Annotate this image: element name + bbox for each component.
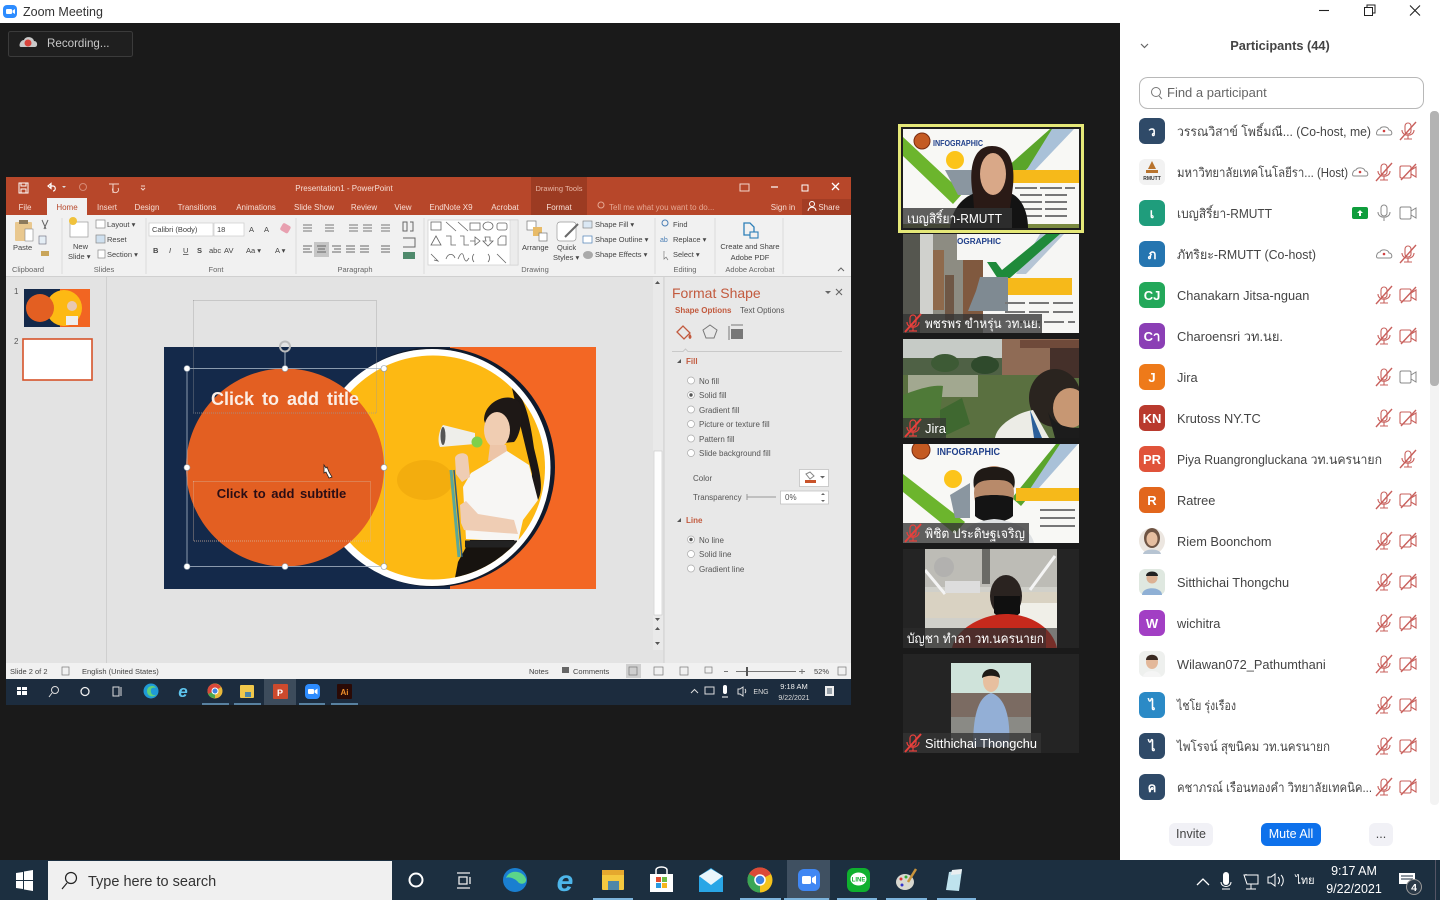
participant row 17 <box>1139 774 1416 800</box>
format shape pane <box>664 277 851 663</box>
fill radio options: No fill <box>699 377 719 386</box>
slide scrollbar <box>653 277 663 650</box>
ribbon <box>6 215 851 277</box>
transparency control <box>693 491 828 504</box>
status bar: Comments <box>573 667 610 676</box>
video tile: เบญสิริ์ยา-RMUTT (active speaker) <box>900 126 1082 232</box>
participant row 14 <box>1139 651 1416 677</box>
clipboard group <box>12 220 49 274</box>
status bar <box>6 663 851 679</box>
drawing group: Drawing <box>521 265 549 274</box>
participant row 15 <box>1139 692 1416 718</box>
powerpoint title bar: Share <box>818 203 840 212</box>
participant row 8 <box>1139 405 1416 431</box>
line <box>847 868 870 892</box>
search box: Find a participant <box>1167 85 1267 100</box>
video tile: Sitthichai Thongchu <box>903 654 1079 753</box>
drawing group: Styles ▾ <box>553 253 580 262</box>
powerpoint title bar: Format <box>546 203 572 212</box>
font group: Calibri (Body) <box>152 225 198 234</box>
status bar: 52% <box>814 667 829 676</box>
powerpoint title bar: Drawing Tools <box>536 184 583 193</box>
inner windows taskbar: P <box>277 688 283 698</box>
powerpoint title bar <box>6 177 851 215</box>
inner windows taskbar: 9/22/2021 <box>778 695 810 702</box>
selection handles <box>184 342 387 570</box>
invite button <box>1169 823 1213 846</box>
powerpoint window <box>6 177 851 705</box>
slides group <box>68 217 138 274</box>
clipboard group: Clipboard <box>12 265 44 274</box>
drawing group: Shape Effects ▾ <box>595 250 648 259</box>
system tray: 9:17 AM <box>1331 864 1377 878</box>
editing group: Find <box>673 220 688 229</box>
slide thumbnails <box>14 277 106 663</box>
slides group: Slide ▾ <box>68 252 91 261</box>
participant row 16: ไพโรจน์ สุขนิคม วท.นครนายก <box>1176 739 1330 755</box>
drawing group: Arrange <box>522 243 549 252</box>
participant row 14: Wilawan072_Pathumthani <box>1177 657 1326 672</box>
powerpoint title bar: Presentation1 - PowerPoint <box>295 184 393 193</box>
cortana and task view <box>410 873 470 888</box>
adobe acrobat group: Create and Share <box>720 242 780 251</box>
subtitle placeholder <box>194 482 370 541</box>
taskbar app icons <box>503 860 976 900</box>
participant row 4: ภัทริยะ-RMUTT (Co-host) <box>1177 247 1316 262</box>
participant row 16 <box>1139 733 1416 759</box>
participant row 4: ภ <box>1148 247 1156 262</box>
mute all button <box>1261 823 1321 846</box>
participant row 17: ค <box>1148 780 1156 795</box>
drawing group: Shape Outline ▾ <box>595 235 649 244</box>
colour control <box>693 470 828 486</box>
line radio options: No line <box>699 536 724 545</box>
fill effects icons <box>677 325 743 340</box>
line: LINE <box>852 878 865 884</box>
fill radio options: Picture or texture fill <box>699 420 770 429</box>
participants panel <box>1120 0 1440 860</box>
status bar: Notes <box>529 667 549 676</box>
participant row 5: Chanakarn Jitsa-nguan <box>1177 288 1309 303</box>
video tile: เบญสิริ์ยา-RMUTT (active speaker): INFOGRAPHIC <box>933 139 983 148</box>
powerpoint title bar: Design <box>135 203 159 212</box>
orange circle shape <box>186 368 384 566</box>
transparency control: 0% <box>785 493 797 502</box>
video tile: เบญสิริ์ยา-RMUTT (active speaker): เบญสิริ์ยา-RMUTT <box>907 209 1002 226</box>
participant row 6: Cา <box>1144 329 1160 344</box>
fill radio options <box>688 377 771 458</box>
powerpoint title bar: EndNote X9 <box>429 203 473 212</box>
font group: Font <box>208 265 224 274</box>
participant row 1: วรรณวิสาข์ โพธิ์มณี... (Co-host, me) <box>1177 122 1371 139</box>
adobe acrobat group: Adobe PDF <box>731 253 770 262</box>
transparency control: Transparency <box>693 493 742 502</box>
font group: Aa ▾ <box>246 246 261 255</box>
font group: B <box>153 246 159 255</box>
zoom <box>798 869 820 891</box>
editing group: Editing <box>674 265 696 274</box>
format shape pane: Shape Options <box>675 306 732 315</box>
inner windows taskbar: ENG <box>753 689 769 696</box>
colour control: Color <box>693 474 712 483</box>
participant row 6: Charoensri วท.นย. <box>1177 329 1283 344</box>
participant row 3: เบญสิริ์ยา-RMUTT <box>1177 204 1272 221</box>
video tile: บัญชา ทำลา วท.นครนายก: บัญชา ทำลา วท.นครนายก <box>907 631 1044 646</box>
store <box>650 867 673 892</box>
font group: 18 <box>217 225 225 234</box>
video tile: พชรพร ขำหรุ่น วท.นย. <box>903 234 1079 333</box>
participant row 8: Krutoss NY.TC <box>1177 411 1261 426</box>
zoom title bar <box>0 0 1120 23</box>
format shape pane: Fill <box>686 357 698 366</box>
video tile: พิชิต ประดิษฐเจริญ: INFOGRAPHIC <box>937 447 1000 458</box>
participant row 9: Piya Ruangrongluckana วท.นครนายก <box>1177 452 1382 467</box>
paragraph group <box>303 222 415 274</box>
slide thumbnails: 2 <box>14 337 19 346</box>
taskbar search box: Type here to search <box>88 874 216 890</box>
more button: ... <box>1376 827 1386 841</box>
powerpoint title bar: File <box>19 203 32 212</box>
powerpoint title bar: Transitions <box>178 203 216 212</box>
participant row 8: KN <box>1143 411 1161 426</box>
drawing group <box>428 220 649 274</box>
scrollbar <box>1430 111 1439 805</box>
panel header <box>1141 38 1330 53</box>
fill radio options: Slide background fill <box>699 449 771 458</box>
participant row 7: Jira <box>1177 370 1199 385</box>
powerpoint title bar: Review <box>351 203 377 212</box>
fill radio options: Gradient fill <box>699 406 740 415</box>
powerpoint title bar: Slide Show <box>294 203 334 212</box>
slides group: Section ▾ <box>107 250 138 259</box>
panel header: Participants (44) <box>1230 38 1330 53</box>
font group: A ▾ <box>275 246 286 255</box>
search box <box>1140 78 1424 108</box>
fill radio options: Pattern fill <box>699 435 735 444</box>
chrome <box>747 867 772 893</box>
notepad <box>946 869 962 891</box>
format shape pane: Format Shape <box>672 285 761 301</box>
title placeholder <box>194 300 376 413</box>
inner windows taskbar: 9:18 AM <box>780 682 808 691</box>
subtitle placeholder: Click to add subtitle <box>217 486 346 501</box>
participant row 11 <box>1139 528 1416 554</box>
participant row 10: R <box>1147 493 1157 508</box>
video tile: พิชิต ประดิษฐเจริญ: พิชิต ประดิษฐเจริญ <box>925 526 1025 542</box>
participant row 3 <box>1139 200 1416 226</box>
participant row 7 <box>1139 364 1416 390</box>
more button <box>1369 823 1393 846</box>
powerpoint title bar: View <box>394 203 412 212</box>
system tray: 9/22/2021 <box>1326 882 1382 896</box>
format shape pane: Line <box>686 516 703 525</box>
mouse cursor <box>324 465 332 478</box>
mute all button: Mute All <box>1269 827 1313 841</box>
video tile: พชรพร ขำหรุ่น วท.นย.: OGRAPHIC <box>957 237 1001 246</box>
participant row 10 <box>1139 487 1416 513</box>
participant row 13 <box>1139 610 1416 636</box>
drawing group: Shape Fill ▾ <box>595 220 634 229</box>
system tray: ไทย <box>1294 874 1315 887</box>
system tray <box>1197 860 1436 900</box>
fill radio options: Solid fill <box>699 391 727 400</box>
line radio options: Solid line <box>699 550 732 559</box>
powerpoint title bar: Tell me what you want to do... <box>609 203 714 212</box>
line radio options <box>688 536 745 574</box>
participant row 17: คชาภรณ์ เรือนทองคำ วิทยาลัยเทคนิค... <box>1177 780 1372 795</box>
drawing group: Quick <box>557 243 576 252</box>
participant row 9: PR <box>1143 452 1162 467</box>
powerpoint title bar: Insert <box>97 203 118 212</box>
inner windows taskbar: Ai <box>340 688 348 697</box>
font group: abc <box>209 246 221 255</box>
slides group: Reset <box>107 235 128 244</box>
participant row 4 <box>1139 241 1416 267</box>
powerpoint title bar: Home <box>56 203 78 212</box>
powerpoint title bar: Acrobat <box>491 203 520 212</box>
video tile: Sitthichai Thongchu: Sitthichai Thongchu <box>925 736 1037 751</box>
internet explorer: e <box>557 865 573 898</box>
window controls <box>1319 5 1420 16</box>
participant row 5 <box>1139 282 1416 308</box>
student with megaphone <box>397 388 541 578</box>
video tile: Jira <box>903 339 1087 438</box>
participant row 15: ไชโย รุ่งเรือง <box>1176 698 1236 714</box>
recording indicator <box>8 32 132 56</box>
system tray: 4 <box>1411 882 1417 894</box>
participant row 2 <box>1139 159 1416 185</box>
format shape pane: Text Options <box>740 306 784 315</box>
work area <box>6 277 851 663</box>
participant row 13: W <box>1146 616 1159 631</box>
slides group: New <box>73 242 89 251</box>
font group: A <box>249 225 254 234</box>
slides group: Layout ▾ <box>107 220 136 229</box>
slide thumbnails: 1 <box>14 287 19 296</box>
font group: S <box>197 246 202 255</box>
file explorer <box>602 870 624 890</box>
inner windows taskbar: e <box>178 682 188 701</box>
inner windows taskbar <box>6 679 851 705</box>
participant row 9 <box>1139 446 1416 472</box>
participant row 16: ไ <box>1147 738 1156 754</box>
start button <box>16 870 33 891</box>
participant row 7: J <box>1148 370 1156 385</box>
editing group: ab <box>660 237 668 244</box>
status bar: Slide 2 of 2 <box>10 667 48 676</box>
participant row 2: RMUTT <box>1143 176 1161 182</box>
editing group: Replace ▾ <box>673 235 707 244</box>
powerpoint title bar: Sign in <box>771 203 795 212</box>
participant row 12 <box>1139 569 1416 595</box>
font group: I <box>169 246 171 255</box>
participant row 11: Riem Boonchom <box>1177 534 1272 549</box>
participant row 1: ว <box>1148 124 1156 139</box>
zoom title bar: Zoom Meeting <box>23 5 103 19</box>
editing group <box>660 220 707 274</box>
title placeholder: Click to add title <box>211 389 359 409</box>
participant row 15: ไ <box>1147 697 1156 713</box>
line radio options: Gradient line <box>699 565 745 574</box>
participant row 1 <box>1139 118 1416 144</box>
font group: A <box>264 225 269 234</box>
font group: U <box>183 246 188 255</box>
video tile: พชรพร ขำหรุ่น วท.นย.: พชรพร ขำหรุ่น วท.นย. <box>925 316 1041 332</box>
taskbar search box <box>48 861 392 900</box>
mail <box>699 868 723 892</box>
recording indicator: Recording... <box>47 37 110 50</box>
participant row 2: มหาวิทยาลัยเทคโนโลยีรา... (Host) <box>1177 165 1348 180</box>
adobe acrobat group <box>720 223 844 274</box>
video tile: Jira: Jira <box>925 421 947 436</box>
video tile: พิชิต ประดิษฐเจริญ <box>903 441 1079 543</box>
participant row 13: wichitra <box>1176 616 1221 631</box>
participant row 3: เ <box>1150 206 1154 221</box>
participant row 10: Ratree <box>1177 493 1215 508</box>
participant row 5: CJ <box>1144 288 1160 303</box>
edge <box>503 868 527 892</box>
main slide <box>164 300 596 604</box>
windows taskbar <box>0 860 1440 900</box>
participant row 6 <box>1139 323 1416 349</box>
video tile: บัญชา ทำลา วท.นครนายก <box>903 549 1079 648</box>
status bar: English (United States) <box>82 667 159 676</box>
paragraph group: Paragraph <box>337 265 373 274</box>
paint <box>896 869 916 890</box>
slides group: Slides <box>94 265 114 274</box>
participant row 12: Sitthichai Thongchu <box>1177 575 1289 590</box>
clipboard group: Paste <box>13 243 32 252</box>
invite button: Invite <box>1176 827 1206 841</box>
editing group: Select ▾ <box>673 250 700 259</box>
font group <box>149 223 291 274</box>
powerpoint title bar: Animations <box>236 203 276 212</box>
adobe acrobat group: Adobe Acrobat <box>725 265 776 274</box>
font group: AV <box>224 246 233 255</box>
